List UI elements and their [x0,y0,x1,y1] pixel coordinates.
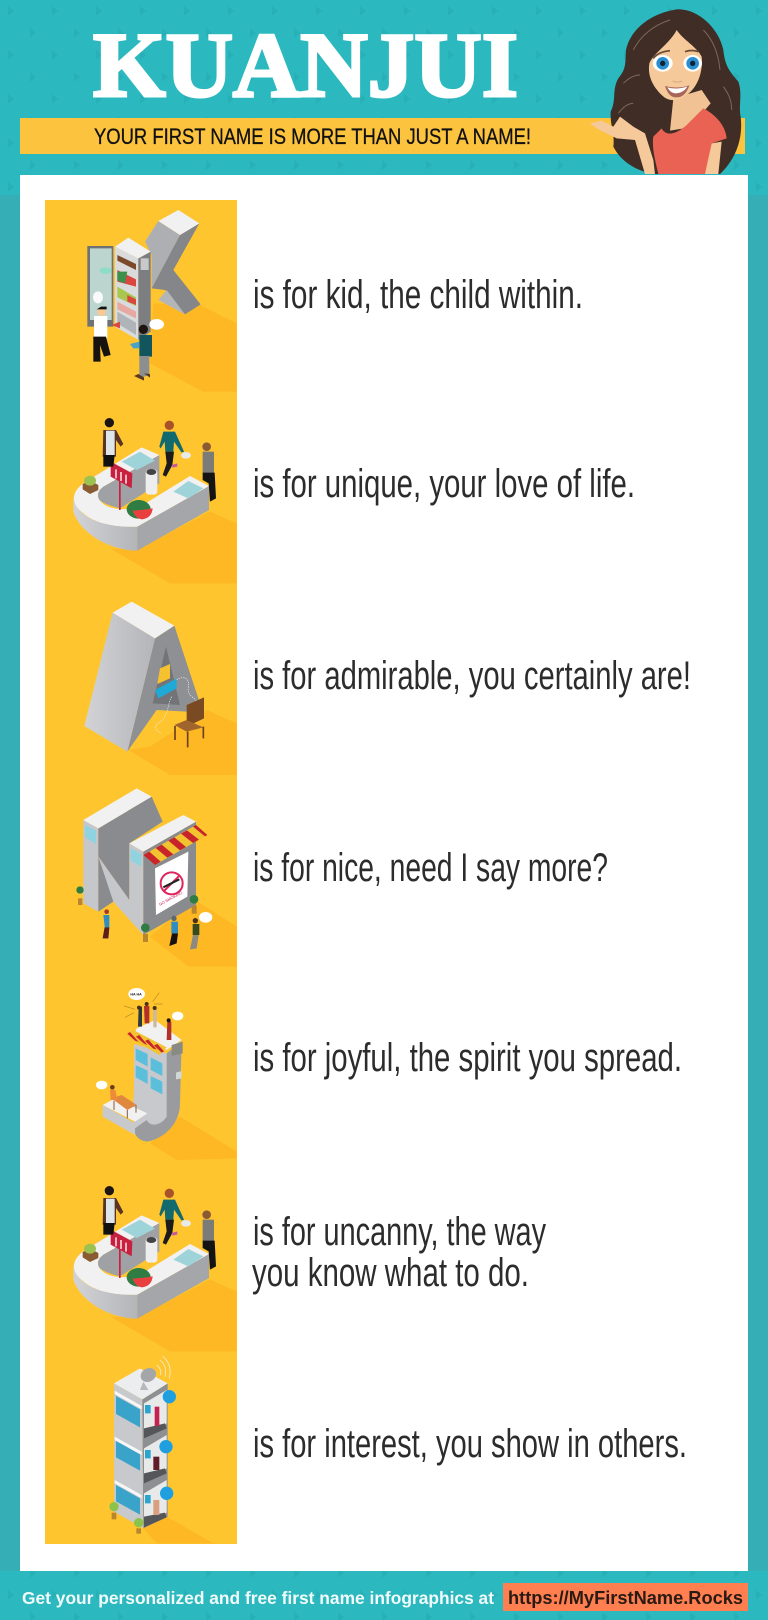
tagline banner: YOUR FIRST NAME IS MORE THAN JUST A NAME! [94,124,531,149]
text: second U line: is for uncanny, the way [253,1210,546,1254]
illustration: letter A with chair [84,602,237,775]
footer: https://MyFirstName.Rocks [508,1588,743,1608]
text: second U line [252,1210,546,1295]
illustration: letter I office tower [109,1356,213,1543]
illustration: letter N with awning: NO SMOKING [158,890,183,907]
tagline banner [20,118,745,154]
illustration: letter K with fridge [87,210,237,392]
text: second U line: you know what to do. [252,1251,529,1295]
text: U line: is for unique, your love of life. [253,462,635,506]
footer: Get your personalized and free first name infographics at [22,1588,494,1608]
illustration: letter U with food counter (repeat) [73,1186,237,1351]
footer [22,1583,748,1611]
illustration: letter J with rooftop people [96,988,237,1160]
title: KUANJUI [93,14,518,116]
illustration: letter N with awning [76,788,237,967]
cartoon woman mascot [590,9,741,174]
text: K line: is for kid, the child within. [253,273,583,317]
illustration: letter J with rooftop people: HA HA [130,992,142,996]
yellow illustration column [45,200,237,1544]
text: N line: is for nice, need I say more? [253,846,608,890]
illustration: letter U with food counter [73,418,237,583]
